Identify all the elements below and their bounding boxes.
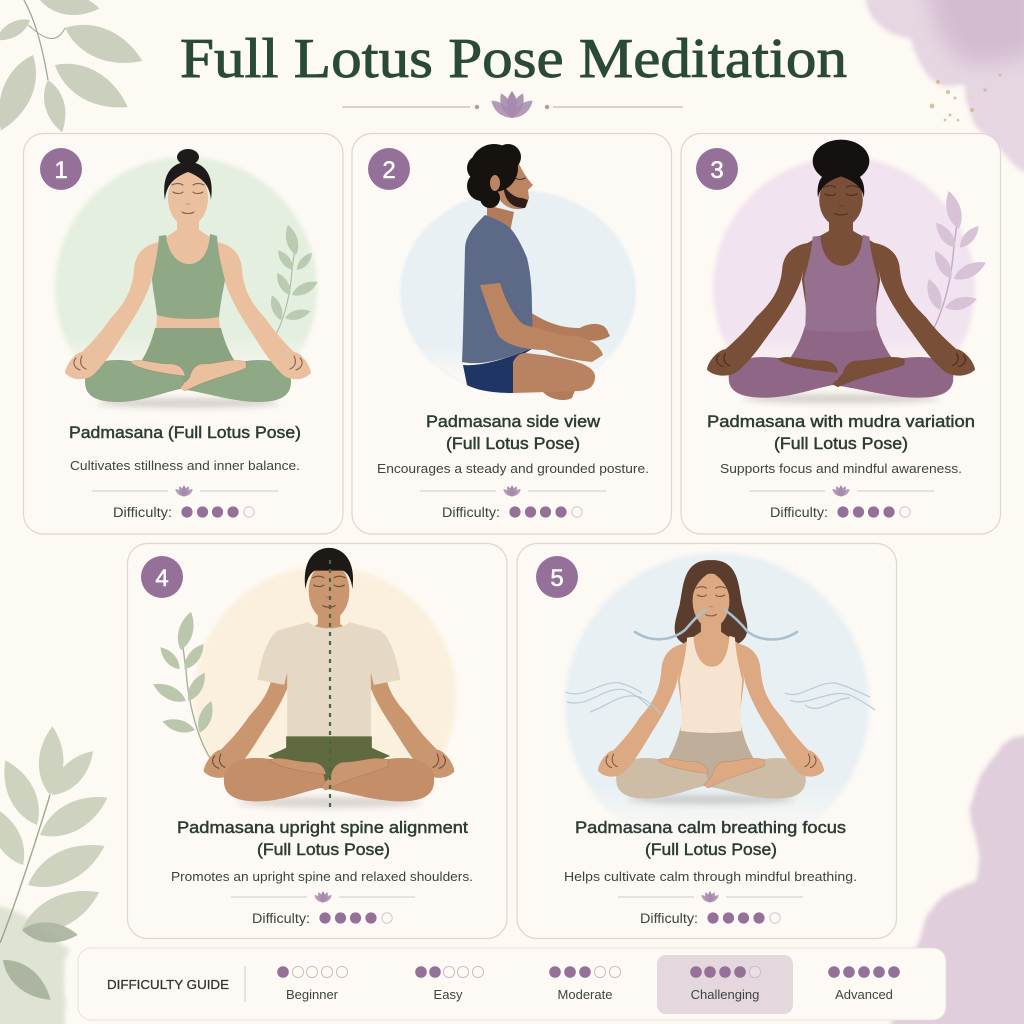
level: moderate: Moderate — [558, 987, 612, 1002]
figure: seated woman in green — [65, 149, 311, 408]
difficulty rating — [113, 505, 254, 520]
level: advanced: Advanced — [835, 987, 893, 1002]
level: easy — [415, 966, 484, 1002]
level: easy: Easy — [434, 987, 463, 1002]
card title — [177, 819, 468, 859]
panel: card 2 — [352, 134, 672, 534]
panel: card 1 — [24, 134, 343, 534]
badge 4 — [141, 556, 183, 598]
difficulty rating: Difficulty: — [252, 911, 310, 926]
ornament — [618, 891, 803, 904]
level: beginner — [277, 966, 348, 1002]
panel: card 3 — [681, 134, 1000, 534]
difficulty rating — [770, 505, 910, 520]
icon: green sprig — [268, 223, 320, 340]
watercolor wash: bottom right — [880, 725, 1024, 1024]
background circle — [713, 157, 975, 419]
description: Encourages a steady and grounded posture. — [377, 461, 649, 476]
level: advanced — [828, 966, 900, 1002]
badge 2: 2 — [382, 157, 396, 184]
card title: (Full Lotus Pose) — [774, 435, 908, 453]
badge 1 — [40, 148, 82, 190]
difficulty rating — [442, 505, 582, 520]
card title — [575, 819, 846, 859]
card title: Padmasana with mudra variation — [707, 413, 975, 431]
card title: Padmasana (Full Lotus Pose) — [69, 424, 301, 442]
figure: seated woman in plum — [707, 140, 975, 404]
breath lines — [635, 610, 797, 640]
ornament — [749, 485, 934, 498]
badge 4: 4 — [155, 565, 169, 592]
panel: difficulty guide — [78, 948, 946, 1020]
badge 5: 5 — [550, 565, 564, 592]
icon: purple sprig — [923, 189, 989, 335]
leaves: top left — [0, 0, 148, 136]
description: Supports focus and mindful awareness. — [720, 461, 962, 476]
difficulty rating: Difficulty: — [113, 505, 172, 520]
figure: seated man side view — [462, 144, 610, 400]
card title: Padmasana upright spine alignment — [177, 819, 468, 837]
badge 5 — [536, 556, 578, 598]
ornament — [92, 485, 278, 498]
card title: (Full Lotus Pose) — [446, 435, 580, 453]
background circle — [400, 190, 636, 394]
level: challenging (highlighted) — [657, 955, 793, 1014]
watercolor wash: top right — [860, 0, 1024, 180]
card title: Padmasana side view — [426, 413, 600, 431]
card title — [707, 413, 975, 453]
description: Helps cultivate calm through mindful breathing. — [564, 869, 857, 884]
panel: card 4 — [128, 544, 507, 938]
badge 3 — [696, 148, 738, 190]
ornament — [231, 891, 415, 904]
level: beginner: Beginner — [286, 987, 339, 1002]
badge 2 — [368, 148, 410, 190]
leaves: bottom left — [0, 726, 114, 1008]
difficulty rating: Difficulty: — [442, 505, 500, 520]
card title: (Full Lotus Pose) — [257, 841, 390, 859]
difficulty rating: Difficulty: — [640, 911, 698, 926]
air waves — [565, 683, 875, 713]
figure: seated woman breathing — [598, 560, 824, 805]
card title — [426, 413, 600, 453]
difficulty rating — [640, 911, 780, 926]
title ornament — [342, 91, 683, 122]
guide heading: DIFFICULTY GUIDE — [107, 977, 229, 992]
watercolor wash: bottom left — [0, 904, 70, 1024]
description: Promotes an upright spine and relaxed shoulders. — [171, 869, 473, 884]
panel: card 5 — [517, 544, 896, 938]
level: moderate — [549, 966, 621, 1002]
card title: Padmasana calm breathing focus — [575, 819, 846, 837]
figure: seated man with spine line — [204, 548, 454, 807]
badge 3: 3 — [710, 157, 724, 184]
icon: green sprig — [150, 610, 217, 758]
description: Cultivates stillness and inner balance. — [70, 458, 300, 473]
spine alignment line — [329, 560, 331, 808]
card title: (Full Lotus Pose) — [645, 841, 777, 859]
badge 1: 1 — [54, 157, 68, 184]
title: Full Lotus Pose Meditation — [180, 28, 847, 90]
ornament — [420, 485, 606, 498]
background circle — [565, 553, 869, 857]
background circle — [55, 157, 317, 419]
difficulty rating — [252, 911, 392, 926]
level: challenging (highlighted): Challenging — [691, 987, 759, 1002]
background circle — [194, 566, 456, 828]
difficulty rating: Difficulty: — [770, 505, 828, 520]
